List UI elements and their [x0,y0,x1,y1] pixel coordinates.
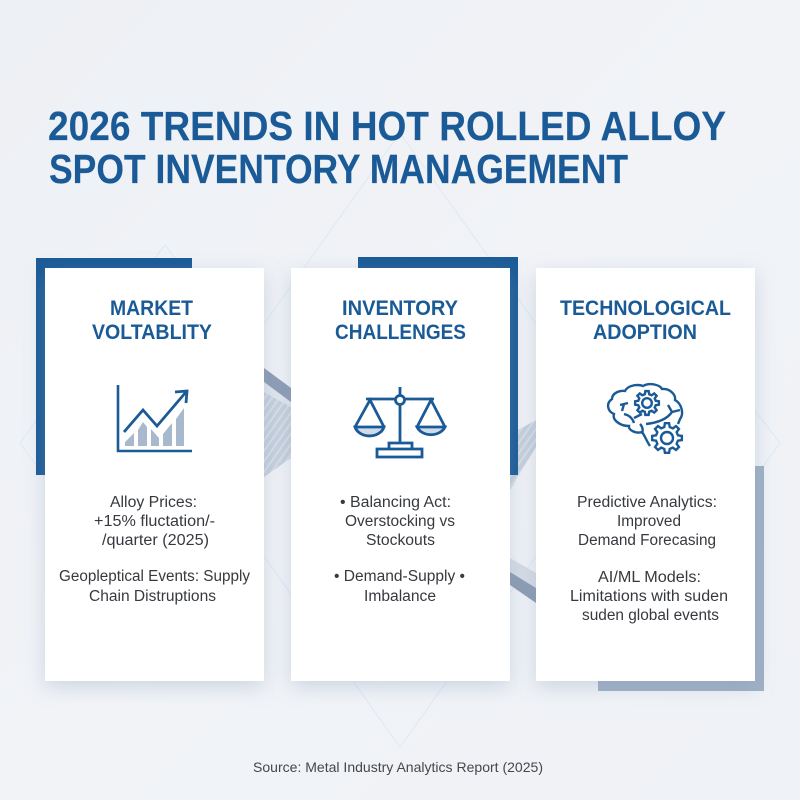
heading: inventory challenges: CHALLENGES [335,321,466,344]
heading: market volatility: MARKET [110,297,193,320]
panel: inventory challenges accent [358,257,518,475]
heading: market volatility: VOLTABLITY [92,321,212,344]
panel: technological adoption [536,268,755,681]
panel: market volatility accent [36,258,192,475]
text: market volatility details [59,494,250,605]
text: market volatility details: Geopleptical Events: Supply [59,568,250,585]
heading: technological adoption: TECHNOLOGICAL [560,297,731,320]
text: technological adoption details: Limitations with suden [570,588,728,605]
heading: technological adoption: ADOPTION [593,321,697,344]
text: inventory challenges details [334,494,465,605]
text: technological adoption details [570,494,728,624]
text: technological adoption details: AI/ML Models: [598,569,701,586]
text: market volatility details: Chain Distruptions [89,588,216,605]
icon: brain with gears [608,384,682,453]
heading: market volatility [92,297,212,344]
icon: rising line chart [118,385,192,451]
source note: Source: Metal Industry Analytics Report (2025) [253,759,543,775]
heading: technological adoption [560,297,731,344]
text: technological adoption details: Predictive Analytics: [577,494,717,511]
panel: technological adoption accent [598,466,764,691]
text: market volatility details: /quarter (2025) [102,532,209,549]
text: technological adoption details: Improved [617,513,681,530]
steel beam between second and third cards [510,420,536,603]
text: technological adoption details: Demand Forecasing [578,532,716,549]
heading: inventory challenges: INVENTORY [342,297,458,320]
text: inventory challenges details: Stockouts [366,532,435,549]
steel beam between first and second cards [264,368,291,477]
title [48,103,726,192]
text: inventory challenges details: Overstocking vs [345,513,455,530]
text: inventory challenges details: • Balancing Act: [340,494,451,511]
background diamonds [20,133,780,747]
title: SPOT INVENTORY MANAGEMENT [49,146,628,192]
text: market volatility details: Alloy Prices: [110,494,197,511]
text: technological adoption details: suden global events [582,607,719,624]
text: inventory challenges details: • Demand-Supply • [334,568,465,585]
panel: inventory challenges [291,268,510,681]
text: market volatility details: +15% fluctation/- [94,513,215,530]
panel: market volatility [45,268,264,681]
icon: balance scales [355,387,445,457]
heading: inventory challenges [335,297,466,344]
text: inventory challenges details: Imbalance [364,588,436,605]
title: 2026 TRENDS IN HOT ROLLED ALLOY [48,103,726,149]
